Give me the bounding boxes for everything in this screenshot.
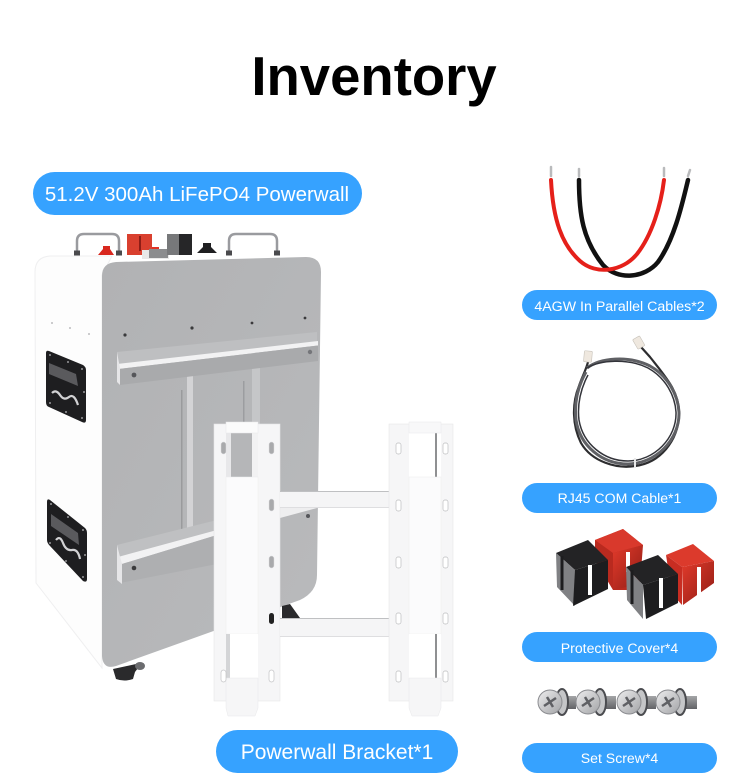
- lower mounting rail: [117, 507, 317, 584]
- icon: top handles: [74, 234, 280, 253]
- upper mounting rail: [117, 332, 318, 385]
- right bracket plate: [389, 422, 453, 716]
- icon: lower side handle: [47, 499, 87, 582]
- icon: set screws: [538, 689, 697, 715]
- left bracket plate: [214, 422, 280, 716]
- bracket crossbars: [280, 492, 389, 636]
- label: bracket: [216, 730, 458, 773]
- label: bracket: Powerwall Bracket*1: [241, 741, 433, 764]
- icon: castor wheels: [113, 604, 300, 680]
- label: protective cover: Protective Cover*4: [561, 640, 678, 656]
- label: RJ45 cable: RJ45 COM Cable*1: [558, 490, 682, 506]
- label: set screw: [522, 743, 717, 773]
- label: parallel cables: 4AGW In Parallel Cables*2: [534, 299, 705, 315]
- icon: top connectors: [98, 234, 217, 259]
- icon: protective covers: [556, 529, 714, 619]
- icon: upper side handle: [46, 351, 86, 423]
- label: parallel cables: [522, 290, 717, 320]
- label: powerwall: 51.2V 300Ah LiFePO4 Powerwall: [45, 183, 349, 206]
- icon: parallel cables: [551, 167, 690, 276]
- title: Inventory: [251, 46, 497, 107]
- icon: RJ45 cable: [574, 336, 679, 468]
- label: protective cover: [522, 632, 717, 662]
- inner struts: [181, 365, 260, 546]
- battery back panel: [102, 257, 321, 667]
- label: RJ45 cable: [522, 483, 717, 513]
- battery side panel: [35, 256, 112, 668]
- powerwall bracket: [214, 422, 453, 716]
- label: set screw: Set Screw*4: [581, 750, 658, 766]
- label: powerwall: [33, 172, 362, 215]
- powerwall battery: [35, 234, 321, 680]
